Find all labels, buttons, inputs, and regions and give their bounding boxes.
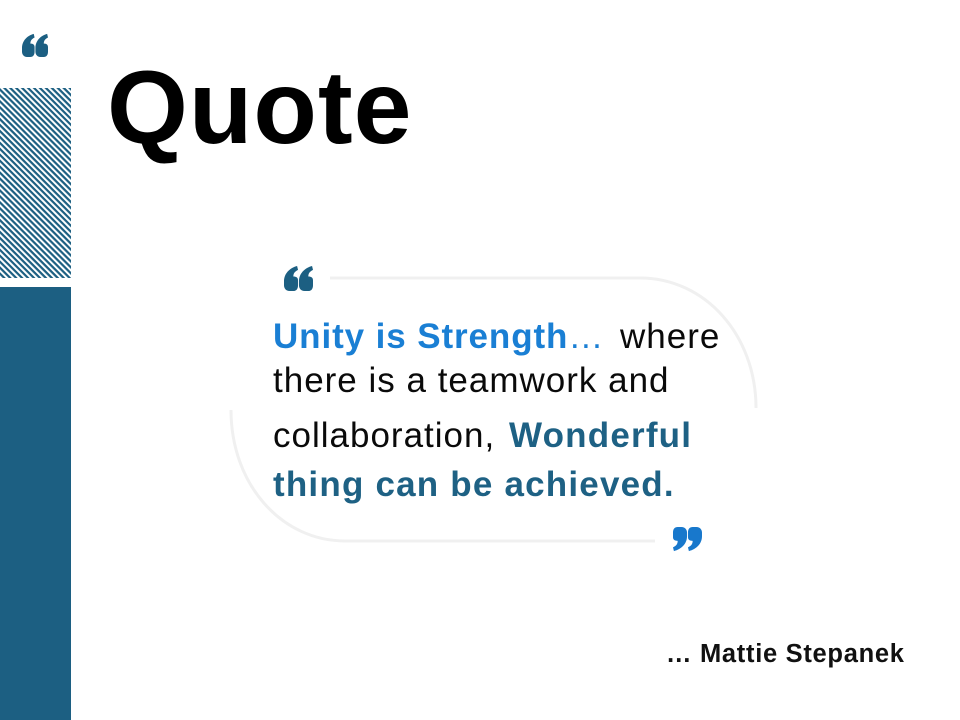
icon: small opening quote mark <box>22 34 48 57</box>
title: Quote <box>107 50 412 166</box>
quote text block: collaboration, <box>273 416 495 455</box>
solid side panel <box>0 287 71 720</box>
quote text block <box>273 316 720 504</box>
icon: closing quote mark <box>673 527 702 552</box>
quote text block: Wonderful <box>509 416 692 455</box>
quote text block: where <box>620 316 720 356</box>
hatched side panel <box>0 88 71 278</box>
icon: large opening quote mark <box>284 266 313 291</box>
quote text block: there is a teamwork and <box>273 361 670 400</box>
attribution: … Mattie Stepanek <box>666 640 905 668</box>
quote text block: thing can be achieved. <box>273 465 675 504</box>
quote text block: Unity is Strength… <box>273 316 604 356</box>
